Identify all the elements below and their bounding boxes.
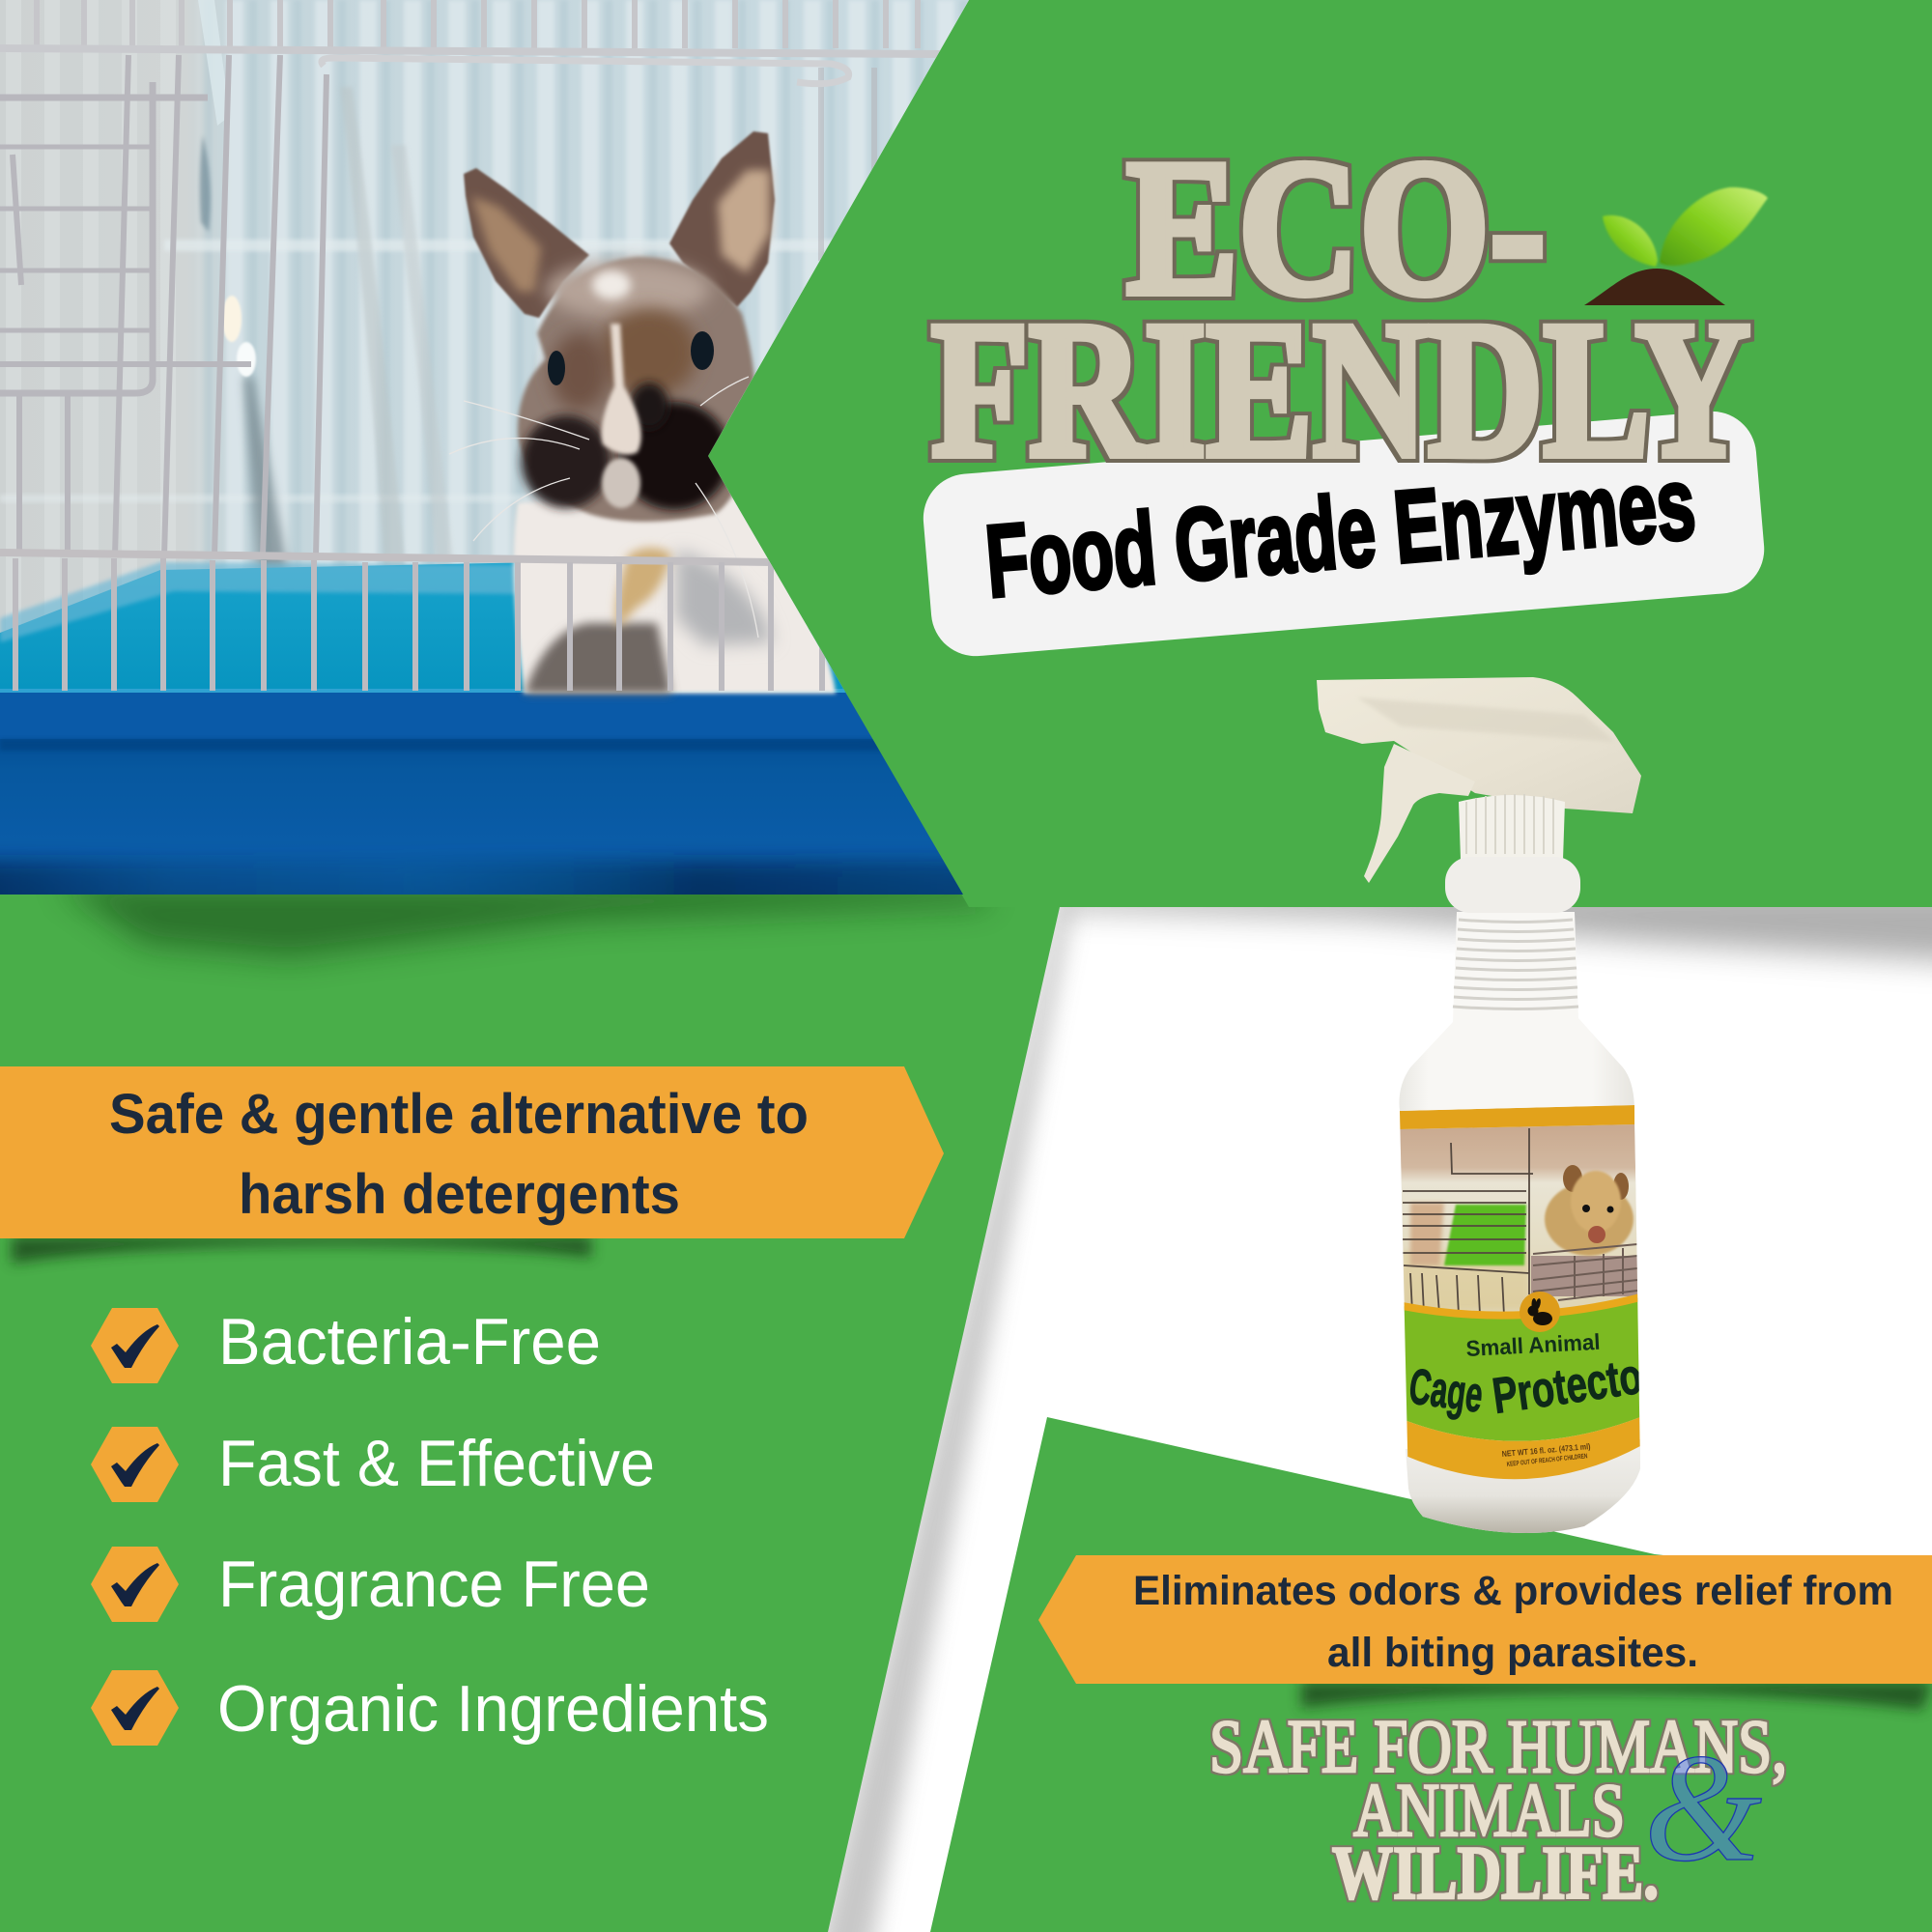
rabbit bbox=[449, 131, 836, 694]
rabbit eyes bbox=[548, 351, 565, 385]
bottle base bbox=[1406, 1439, 1640, 1533]
product label bbox=[1400, 1105, 1660, 1479]
front cage wires bbox=[0, 553, 822, 691]
right ear bbox=[669, 131, 775, 307]
ampersand: & bbox=[1644, 1721, 1762, 1893]
list: benefits bbox=[91, 1305, 769, 1746]
banner text line 2: all biting parasites. bbox=[1327, 1630, 1698, 1676]
white pill: Food Grade Enzymes bbox=[920, 408, 1768, 660]
neck ribs bbox=[1453, 920, 1578, 1009]
hamster bbox=[1545, 1165, 1634, 1256]
label: net weight: NET WT 16 fl. oz. (473.1 ml) bbox=[1501, 1441, 1591, 1459]
label: Cage Protector: Cage bbox=[1406, 1358, 1486, 1424]
label: warning: KEEP OUT OF REACH OF CHILDREN bbox=[1506, 1453, 1588, 1468]
ribbed collar bbox=[1459, 795, 1565, 860]
title line: FRIENDLY: FRIENDLY bbox=[931, 281, 1750, 497]
lower orange band bbox=[1405, 1417, 1640, 1479]
label: Cage Protector: Protector bbox=[1490, 1347, 1660, 1425]
icon: sprout bbox=[1584, 187, 1768, 305]
label: Small Animal: Small Animal bbox=[1465, 1329, 1601, 1361]
banner: eliminates odors bbox=[1038, 1555, 1932, 1684]
rabbit badge bbox=[1520, 1292, 1560, 1332]
left leaf bbox=[1603, 215, 1658, 267]
line: safe for humans: SAFE FOR HUMANS, bbox=[1209, 1704, 1787, 1788]
banner text line 1: Eliminates odors & provides relief from bbox=[1133, 1568, 1893, 1614]
cage tray bbox=[0, 560, 963, 895]
rabbit paw bbox=[616, 548, 671, 628]
label orange line bbox=[1403, 1297, 1640, 1316]
line: animals: ANIMALS bbox=[1353, 1768, 1625, 1852]
label: Cage Protector bbox=[1406, 1347, 1660, 1425]
banner text line 1: Safe & gentle alternative to bbox=[109, 1083, 809, 1146]
bottle body bbox=[1399, 912, 1640, 1533]
spray head bbox=[1317, 677, 1641, 813]
photo: rabbit in a cage bbox=[0, 0, 1014, 920]
spray nozzle shade bbox=[1357, 697, 1615, 742]
text block: safe for humans, animals and wildlife bbox=[1209, 1704, 1787, 1915]
title line: ECO-: ECO- bbox=[1126, 121, 1546, 335]
shadow: left panel edge bbox=[811, 898, 1074, 1932]
upper cage wires bbox=[0, 0, 942, 555]
top orange band bbox=[1400, 1105, 1634, 1129]
item: Organic Ingredients: Organic Ingredients bbox=[217, 1672, 769, 1746]
panel: left green bbox=[0, 895, 1060, 1932]
line: wildlife: WILDLIFE. bbox=[1332, 1831, 1659, 1915]
trigger bbox=[1364, 744, 1475, 883]
soil bbox=[1584, 269, 1725, 305]
collar ribs bbox=[1466, 794, 1553, 854]
photo background bbox=[0, 0, 980, 696]
shadow: upper banner bbox=[12, 1236, 591, 1264]
item: Bacteria-Free: Bacteria-Free bbox=[218, 1305, 601, 1378]
whiskers bbox=[449, 377, 758, 638]
item: Bacteria-Free bbox=[91, 1305, 601, 1383]
shadow: lower banner bbox=[1301, 1682, 1932, 1710]
banner text line 2: harsh detergents bbox=[239, 1163, 680, 1226]
right cage bars bbox=[1533, 1244, 1637, 1300]
rabbit head bbox=[518, 257, 755, 522]
green band bbox=[1403, 1297, 1640, 1441]
label photo bbox=[1400, 1124, 1638, 1319]
panel: bottom right green bbox=[930, 1417, 1932, 1932]
shadow: photo on left panel bbox=[58, 884, 985, 958]
label cage bars bbox=[1403, 1128, 1533, 1316]
left ear bbox=[464, 168, 589, 318]
panel: top right green bbox=[708, 0, 1932, 907]
product: spray bottle bbox=[1317, 677, 1660, 1533]
muzzle bbox=[522, 415, 611, 508]
shadow: under top green panel bbox=[1063, 889, 1932, 966]
item: Fast & Effective: Fast & Effective bbox=[218, 1427, 655, 1500]
rabbit body bbox=[514, 493, 836, 694]
item: Fragrance Free: Fragrance Free bbox=[218, 1548, 650, 1621]
neck ring bbox=[1445, 857, 1580, 913]
right leaf bbox=[1660, 187, 1768, 266]
icon: badge rabbit bbox=[1528, 1298, 1552, 1325]
banner: safe and gentle bbox=[0, 1066, 944, 1238]
facial blaze bbox=[601, 324, 641, 455]
